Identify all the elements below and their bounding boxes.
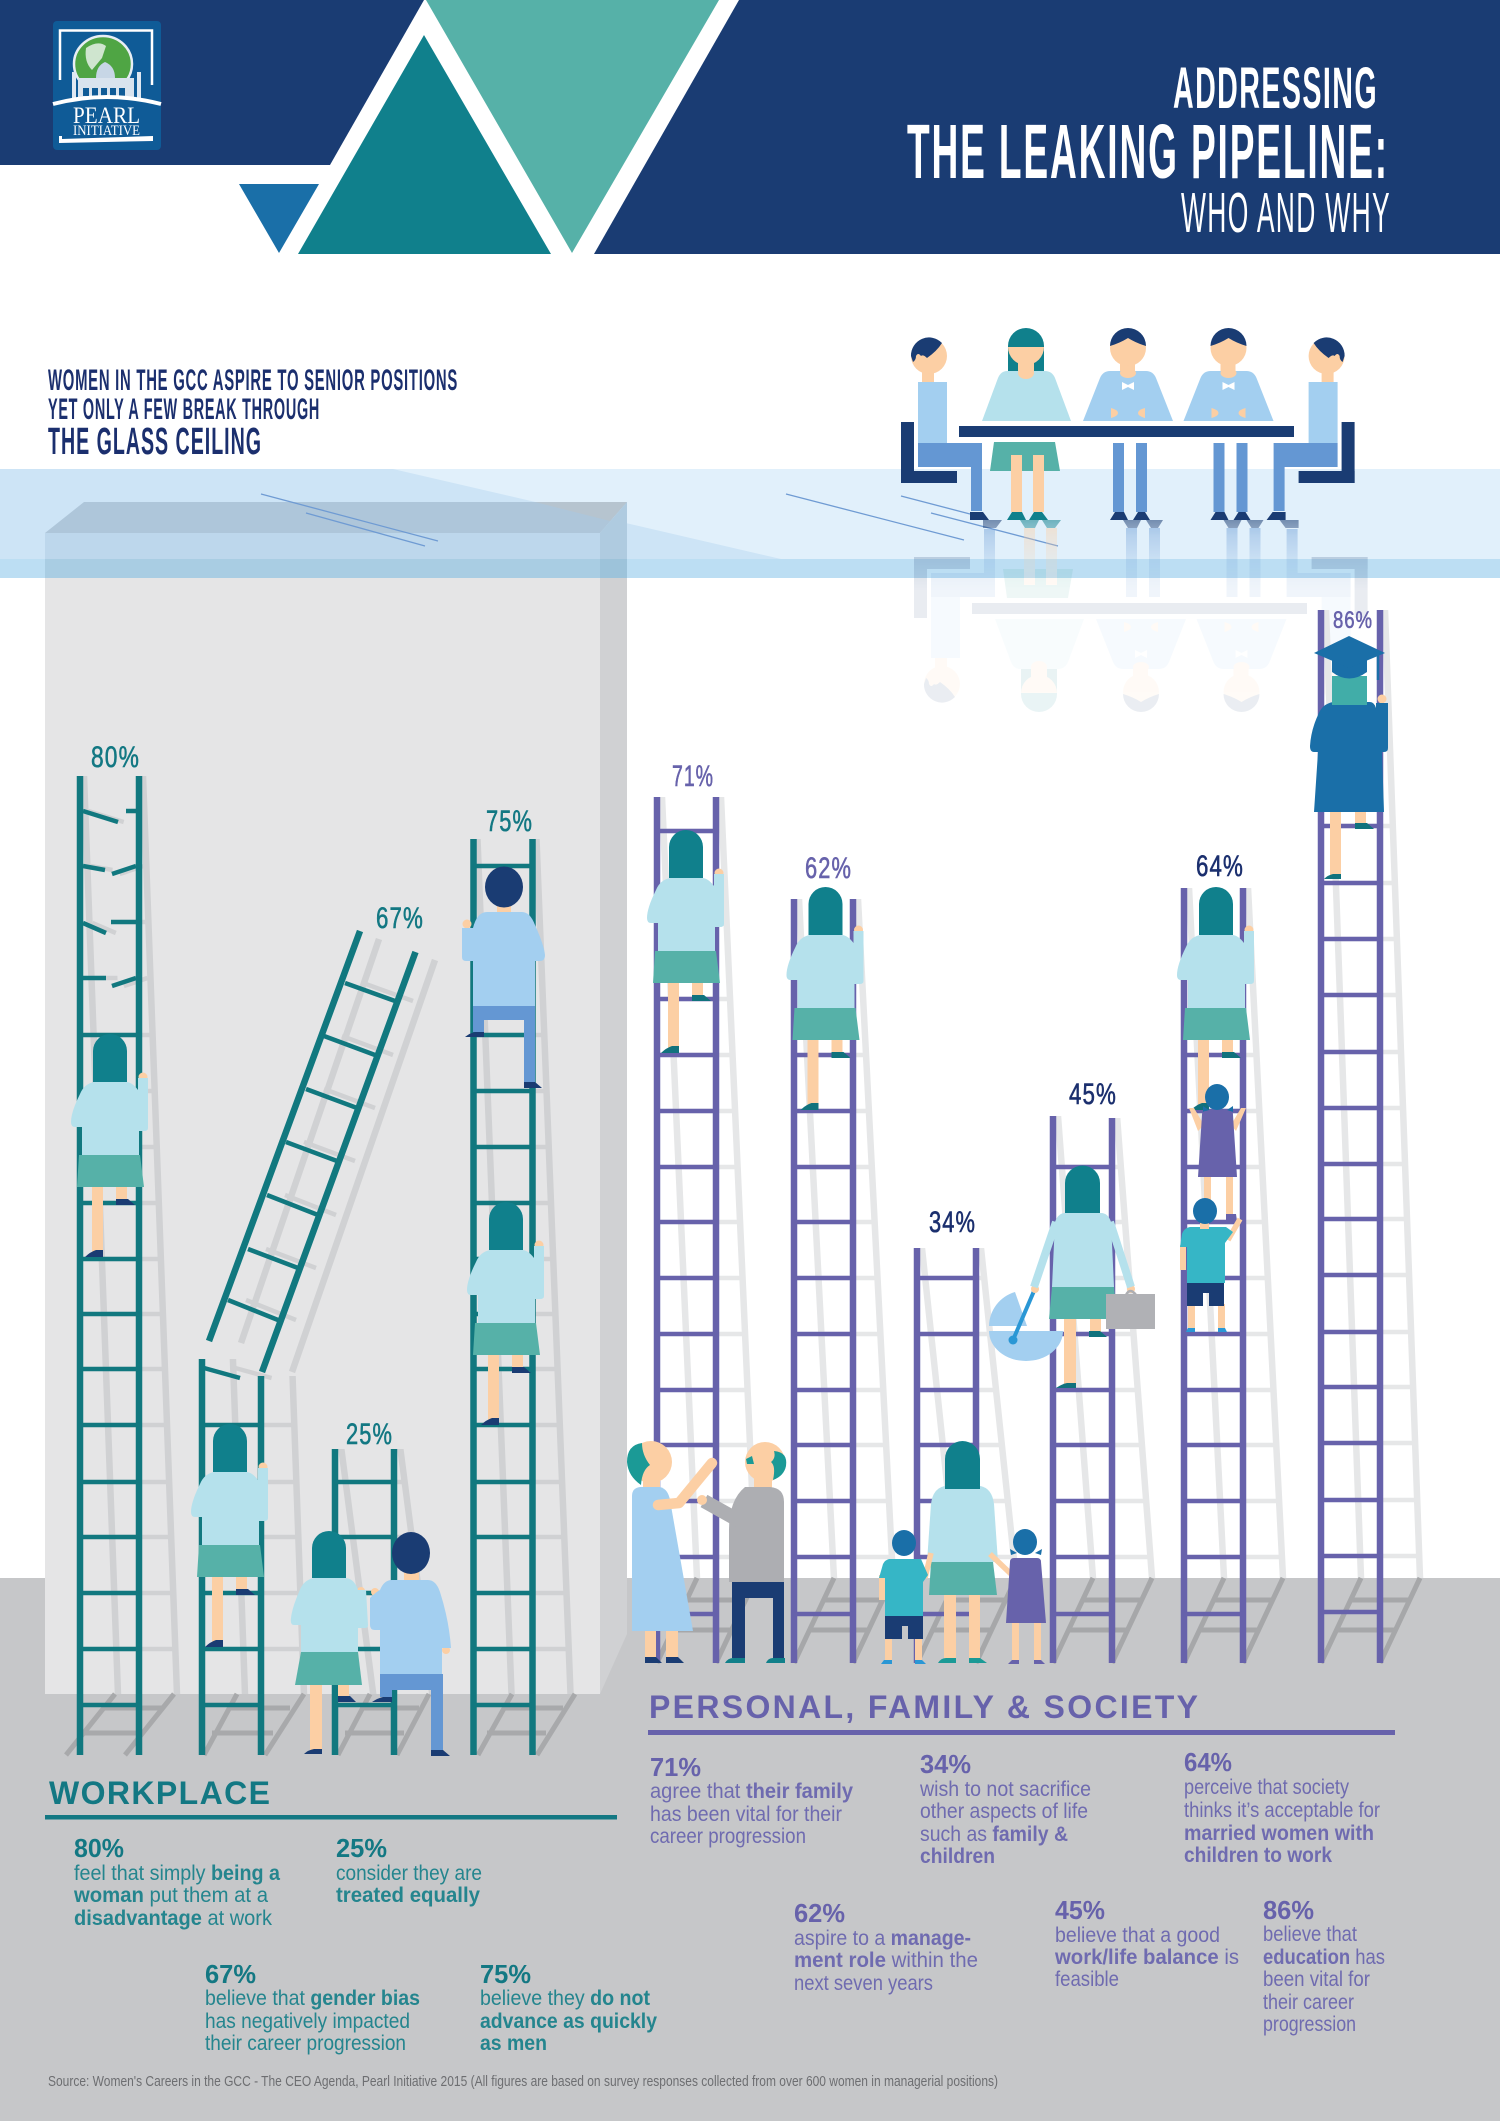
stat: 67% workplace: their career progression <box>205 2032 406 2055</box>
stat: 45% personal: feasible <box>1055 1968 1119 1991</box>
ladder shadows on the wall <box>84 776 573 1755</box>
stat: 34% personal: 34% <box>920 1749 971 1779</box>
stat: 34% personal: other aspects of life <box>920 1800 1088 1823</box>
stat: 75% workplace: advance as quickly <box>480 2010 657 2033</box>
figure: woman with pram and briefcase on 45% ladder <box>989 1166 1155 1388</box>
figure: woman climbing 64% ladder <box>1177 887 1254 1110</box>
stat: 62% personal <box>794 1898 978 1995</box>
ladder: 71% <box>657 797 716 1663</box>
stat: 64% personal: children to work <box>1184 1844 1332 1867</box>
stat: 71% personal: 71% <box>650 1752 701 1782</box>
floor <box>0 1578 1500 2121</box>
stat: 67% workplace: believe that gender bias <box>205 1987 420 2010</box>
ladder: 25% <box>335 1449 394 1755</box>
ladder: 62% <box>794 899 853 1663</box>
source note: Source: Women's Careers in the GCC - The CEO Agenda, Pearl Initiative 2015 (All figures are based on survey responses collected from over 600 women in managerial positions) <box>48 2074 998 2090</box>
boardroom above the glass ceiling <box>901 328 1355 520</box>
figure: boy <box>879 1530 931 1664</box>
heading: workplace <box>45 1775 617 1820</box>
stat: 67% workplace: has negatively impacted <box>205 2010 410 2033</box>
glass ceiling band <box>0 469 1500 578</box>
ladder percentage labels: 86% <box>1333 607 1373 634</box>
stat: 34% personal: such as family & <box>920 1823 1068 1846</box>
ladder percentage labels: 80% <box>91 741 140 774</box>
figure: woman climbing 71% ladder <box>647 830 724 1053</box>
ladder percentage labels <box>91 607 1373 1451</box>
figure: mother <box>927 1441 998 1663</box>
figure: older woman <box>627 1441 712 1663</box>
ladder percentage labels: 62% <box>805 852 852 885</box>
figure: man climbing 75% ladder <box>462 866 545 1088</box>
ladder: 80% broken rungs <box>80 776 139 1755</box>
stat: 64% personal: married women with <box>1184 1822 1374 1845</box>
stat: 80% workplace: disadvantage at work <box>74 1907 272 1930</box>
intro heading: THE GLASS CEILING <box>48 421 262 463</box>
stat: 71% personal: agree that their family <box>650 1780 853 1803</box>
stat: 34% personal: children <box>920 1845 995 1868</box>
figure: woman climbing 62% ladder <box>786 887 864 1110</box>
stat: 62% personal: next seven years <box>794 1972 933 1995</box>
ladder shadows on the floor: personal <box>657 1578 1420 1663</box>
stat: 86% personal: been vital for <box>1263 1968 1370 1991</box>
text: WOMEN IN THE GCC ASPIRE TO SENIOR POSITIONS <box>48 364 458 397</box>
stat: 25% workplace <box>336 1833 482 1907</box>
boardroom reflection <box>914 520 1368 712</box>
stat: 67% workplace: 67% <box>205 1959 256 1989</box>
stat: 25% workplace: 25% <box>336 1833 387 1863</box>
stat: 62% personal: ment role within the <box>794 1949 978 1972</box>
stat: 80% workplace <box>73 1833 280 1930</box>
stat: 71% personal: career progression <box>650 1825 806 1848</box>
stat: 64% personal: 64% <box>1184 1747 1232 1777</box>
stat: 62% personal: aspire to a manage- <box>794 1927 971 1950</box>
figure: woman climbing 80% ladder <box>71 1034 148 1257</box>
heading: personal, family and society: PERSONAL, FAMILY & SOCIETY <box>649 1689 1198 1725</box>
ladder shadows on the wall: personal <box>662 610 1423 1663</box>
stat: 71% personal: has been vital for their <box>650 1803 842 1826</box>
intro heading <box>48 364 458 463</box>
ladder percentage labels: 75% <box>486 805 533 838</box>
ladder percentage labels: 71% <box>672 760 714 793</box>
stat: 64% personal <box>1184 1747 1380 1867</box>
ladder: 34% <box>917 1248 976 1663</box>
stat: 62% personal: 62% <box>794 1898 845 1928</box>
stat: 75% workplace: as men <box>480 2032 547 2055</box>
ladder percentage labels: 45% <box>1069 1078 1117 1111</box>
stat: 75% workplace: 75% <box>480 1959 531 1989</box>
stat: 25% workplace: treated equally <box>336 1884 480 1907</box>
intro heading: YET ONLY A FEW BREAK THROUGH <box>48 393 320 426</box>
ladder percentage labels: 25% <box>346 1418 393 1451</box>
ladder: 45% <box>1053 1116 1112 1663</box>
ladder: 86% <box>1321 610 1380 1663</box>
stat: 34% personal: wish to not sacrifice <box>919 1778 1091 1801</box>
stat: 45% personal: work/life balance is <box>1054 1946 1239 1969</box>
stat: 25% workplace: consider they are <box>336 1862 482 1885</box>
ladder percentage labels: 34% <box>929 1206 976 1239</box>
figure: girl climbing 64% ladder <box>1189 1084 1246 1221</box>
ladder: 64% <box>1184 888 1243 1663</box>
stat: 80% workplace: woman put them at a <box>73 1884 268 1907</box>
ladder shadows on the floor: workplace <box>66 1694 575 1755</box>
figure: woman climbing 75% ladder <box>467 1202 544 1425</box>
heading: personal, family and society <box>648 1689 1395 1735</box>
title <box>907 56 1391 245</box>
stat: 75% workplace <box>480 1959 657 2055</box>
stat: 86% personal: 86% <box>1263 1895 1314 1925</box>
figure: girl <box>990 1529 1046 1664</box>
stat: 86% personal: education has <box>1263 1946 1385 1969</box>
figure: man at 25% ladder <box>370 1532 451 1756</box>
stat: 75% workplace: believe they do not <box>480 1987 650 2010</box>
ladder: 67% broken, leaning upper part <box>209 931 416 1372</box>
stat: 86% personal <box>1263 1895 1385 2036</box>
figure: woman at 25% ladder <box>291 1531 368 1754</box>
figure: woman climbing broken 67% ladder <box>191 1424 268 1647</box>
stat: 80% workplace: 80% <box>74 1833 124 1863</box>
header banner <box>0 0 1500 254</box>
figure: graduate on 86% ladder <box>1310 636 1388 879</box>
stat: 64% personal: perceive that society <box>1184 1776 1349 1799</box>
stat: 86% personal: believe that <box>1263 1923 1357 1946</box>
figure: boy climbing 64% ladder <box>1180 1198 1240 1332</box>
stat: 86% personal: their career <box>1263 1991 1354 2014</box>
stat: 71% personal <box>650 1752 853 1848</box>
stat: 45% personal <box>1054 1895 1239 1991</box>
stat: 67% workplace <box>205 1959 420 2055</box>
heading: workplace: WORKPLACE <box>49 1775 270 1811</box>
stat: 45% personal: 45% <box>1055 1895 1105 1925</box>
ladder: 67% broken, lower part <box>202 1359 261 1755</box>
ladder percentage labels: 67% <box>376 902 424 935</box>
figure: older man <box>697 1442 786 1663</box>
building <box>45 578 627 1694</box>
logo: Pearl Initiative: INITIATIVE <box>73 123 140 139</box>
stat: 34% personal <box>919 1749 1091 1868</box>
logo: Pearl Initiative <box>53 21 161 150</box>
logo: Pearl Initiative: PEARL <box>73 103 140 128</box>
ladder percentage labels: 64% <box>1196 850 1244 883</box>
stat: 45% personal: believe that a good <box>1055 1924 1220 1947</box>
stat: 64% personal: thinks it’s acceptable for <box>1184 1799 1380 1822</box>
stat: 86% personal: progression <box>1263 2013 1356 2036</box>
ladder: 75% <box>474 839 532 1755</box>
stat: 80% workplace: feel that simply being a <box>74 1862 280 1885</box>
